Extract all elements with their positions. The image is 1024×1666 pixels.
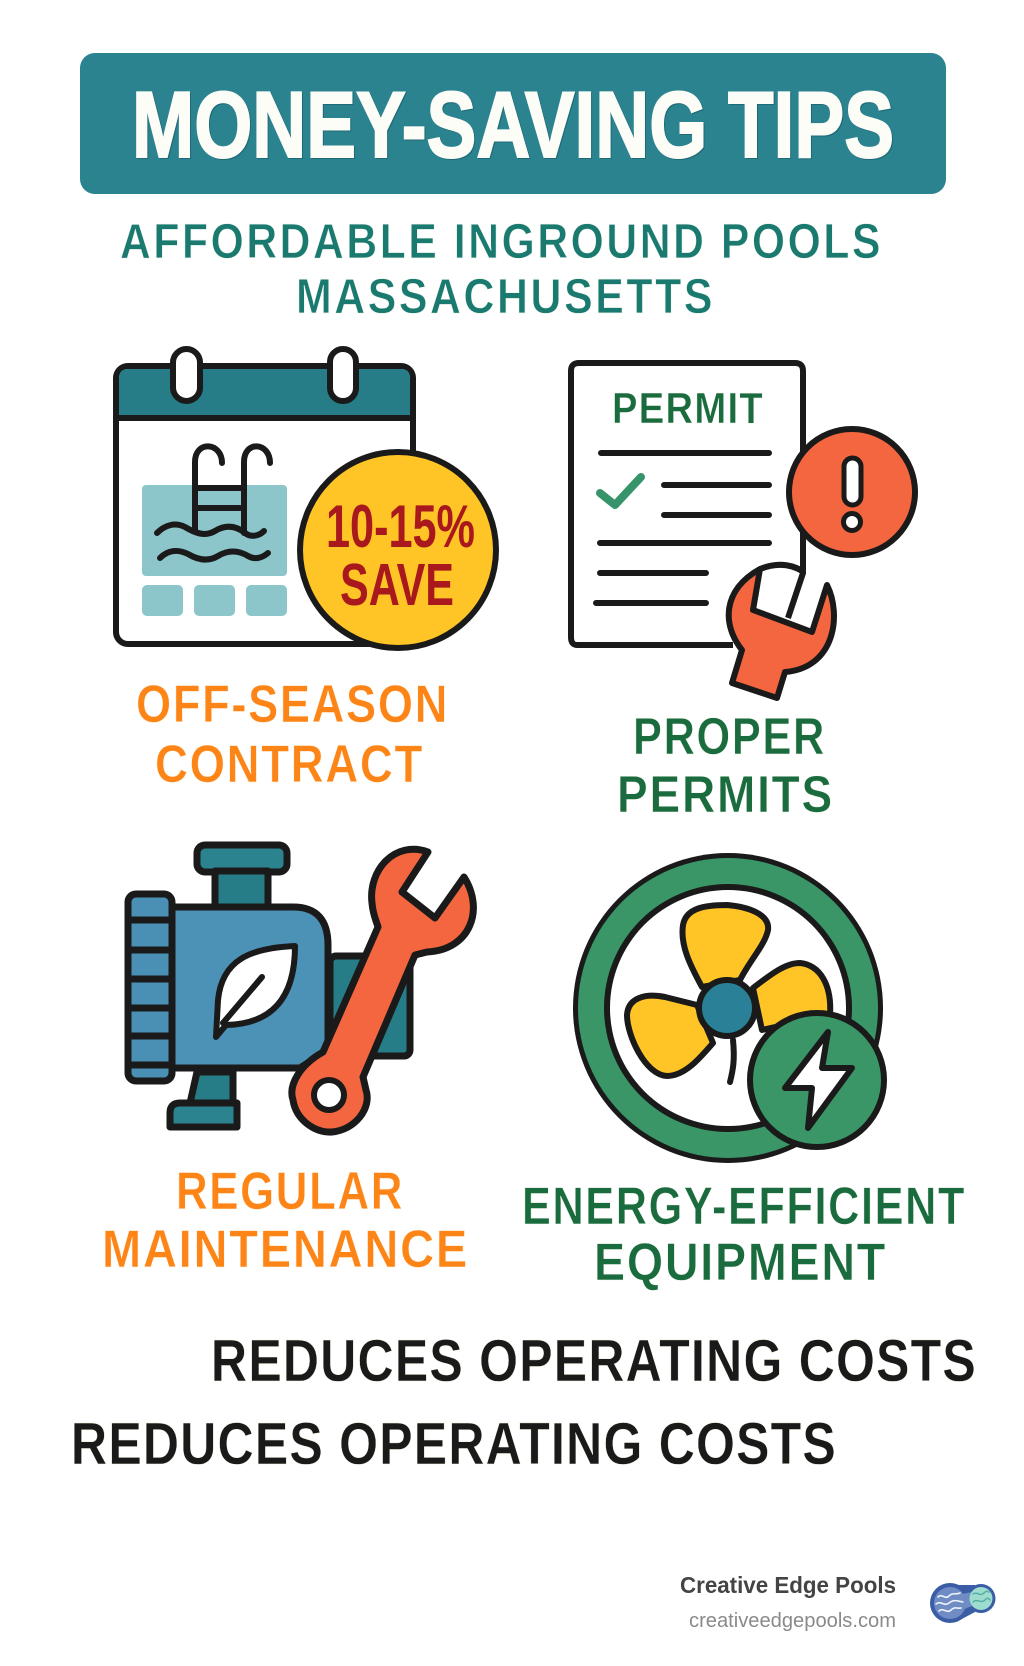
label: regular maintenance	[102, 1162, 469, 1279]
subtitle: AFFORDABLE INGROUND POOLS	[120, 215, 883, 269]
icon: pump	[128, 845, 410, 1127]
icon: fan ring	[573, 853, 883, 1163]
badge: 10-15% save: SAVE	[340, 552, 454, 618]
icon: wrench	[729, 565, 834, 698]
footer brand: Creative Edge Pools	[680, 1572, 896, 1598]
icon: pool with ladder	[142, 446, 287, 616]
label: regular maintenance: REGULAR	[176, 1162, 404, 1221]
label: regular maintenance: MAINTENANCE	[102, 1220, 469, 1279]
icon: leaf	[216, 946, 295, 1037]
panel: off-season contract	[116, 349, 496, 794]
icon: lightning badge	[750, 1013, 884, 1147]
icon: permit document: PERMIT	[612, 384, 764, 433]
label: off-season contract: CONTRACT	[155, 735, 424, 794]
label: off-season contract	[136, 675, 449, 794]
label: energy-efficient equipment	[522, 1177, 966, 1292]
footer brand: creativeedgepools.com	[689, 1610, 896, 1632]
badge: 10-15% save: 10-15%	[326, 493, 475, 560]
icon: logo	[930, 1583, 996, 1623]
icon: permit document	[571, 363, 803, 645]
label: proper permits	[617, 708, 834, 824]
badge: 10-15% save	[300, 452, 496, 648]
panel: proper permits	[571, 363, 915, 824]
title banner	[80, 53, 946, 194]
label: proper permits: PERMITS	[617, 766, 834, 824]
panel: energy-efficient equipment	[522, 853, 966, 1292]
subtitle: MASSACHUSETTS	[296, 270, 715, 324]
icon: calendar	[116, 349, 413, 644]
icon: wrench	[292, 849, 473, 1132]
icon: fan blades	[627, 905, 830, 1082]
subtitle	[120, 215, 883, 324]
label: energy-efficient equipment: EQUIPMENT	[594, 1233, 887, 1292]
icon: alert circle	[789, 429, 915, 555]
footer brand	[680, 1572, 996, 1632]
label: proper permits: PROPER	[633, 708, 826, 766]
label: off-season contract: OFF-SEASON	[136, 675, 449, 734]
panel: regular maintenance	[102, 845, 473, 1279]
text: reduces operating costs, left: REDUCES OPERATING COSTS	[71, 1411, 837, 1477]
